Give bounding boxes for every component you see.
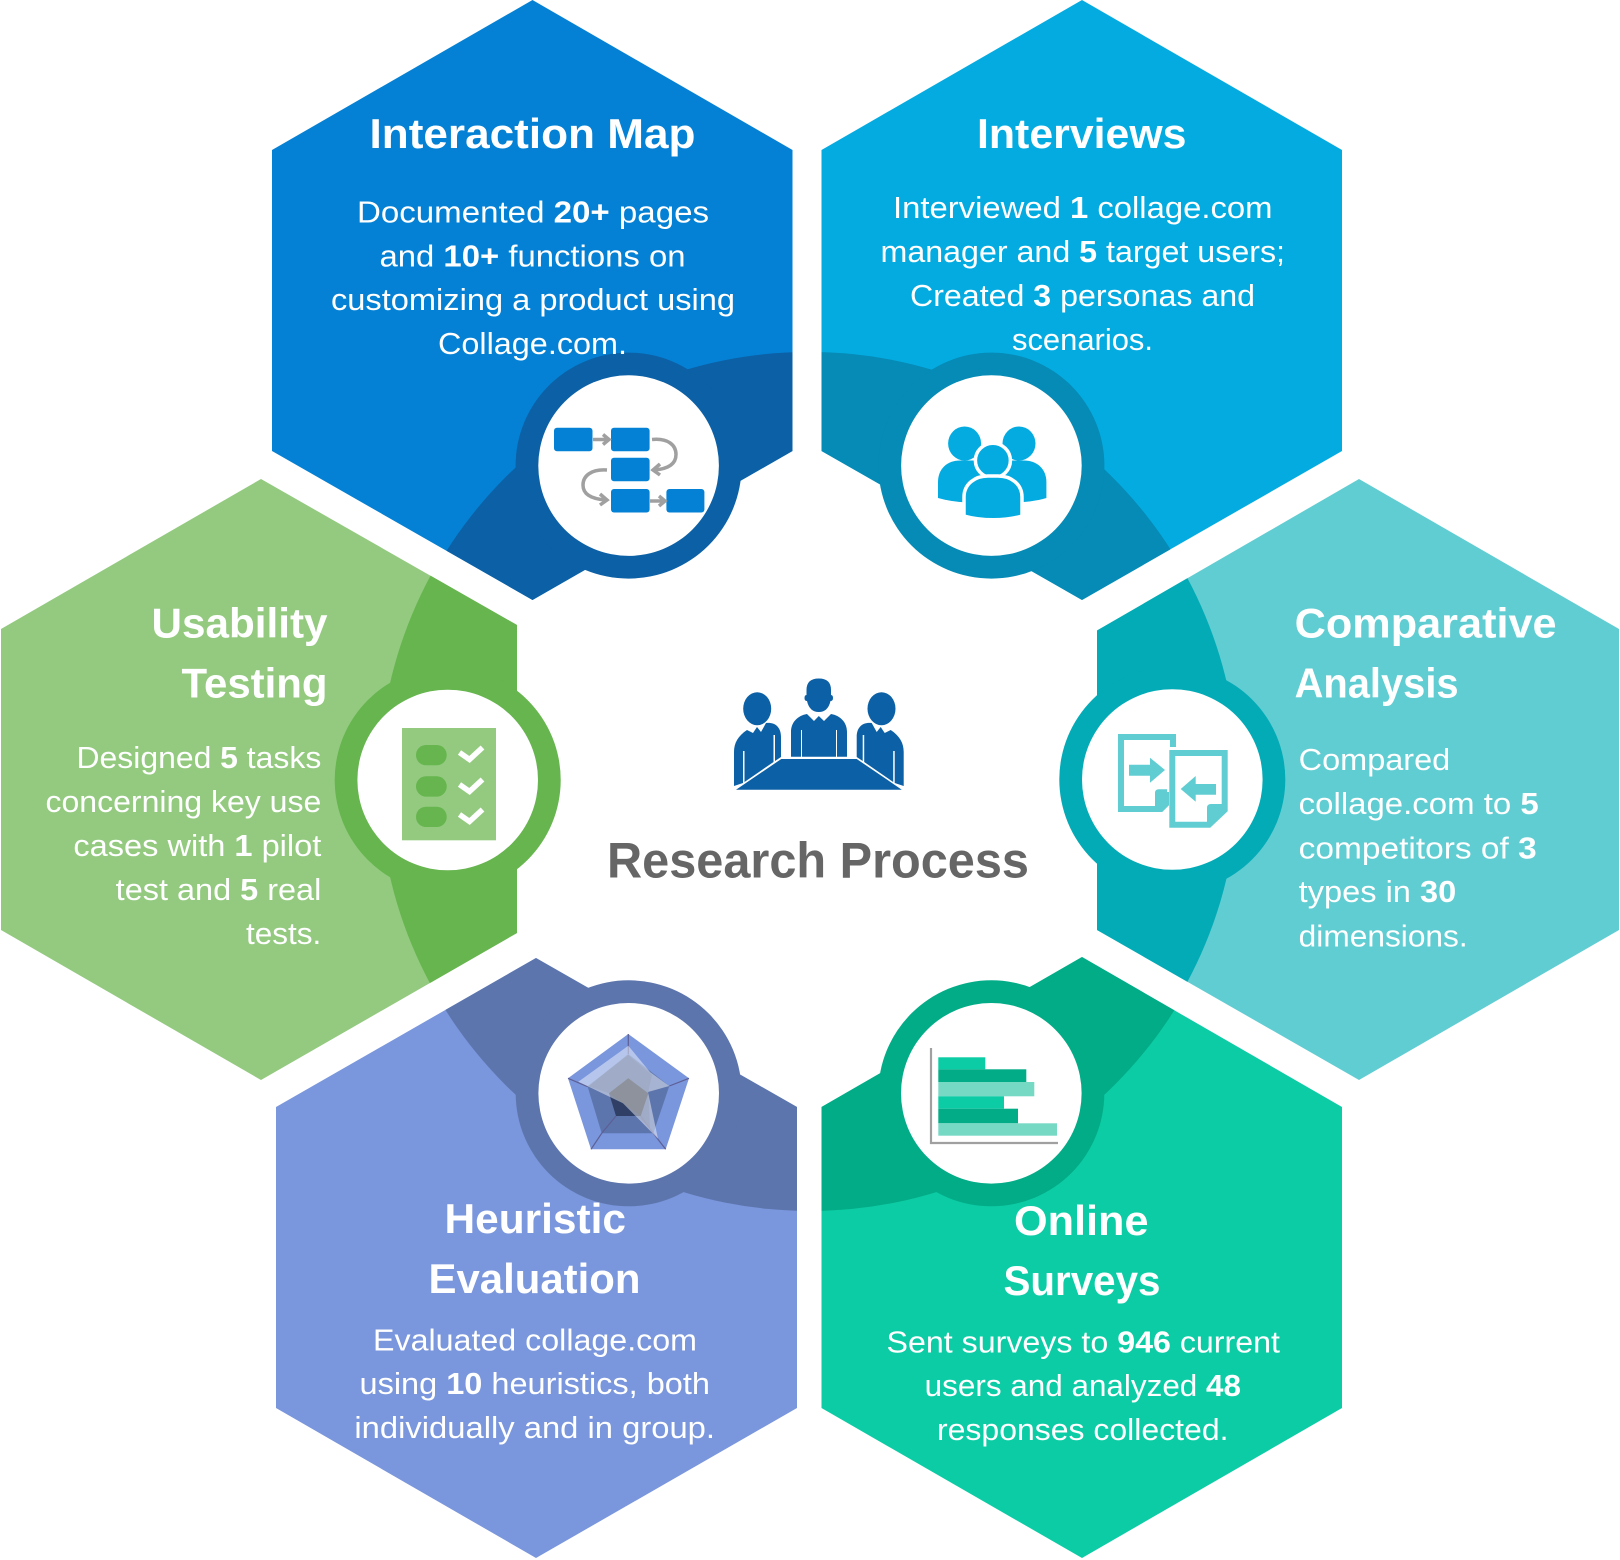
panel: Interaction Map — [272, 0, 792, 600]
text block: usability testing description: cases with 1 pilot — [73, 828, 322, 863]
heading: Interaction Map: Interaction Map — [370, 110, 696, 157]
text block: heuristic evaluation description — [354, 1322, 715, 1445]
inner dark band — [822, 957, 1174, 1211]
heading: Usability Testing: Usability — [152, 600, 328, 646]
text block: interaction map description: customizing a product using — [331, 282, 735, 317]
panel: Online Surveys — [822, 957, 1342, 1558]
text block: comparative analysis description: Compared — [1299, 742, 1450, 777]
text block: online surveys description: responses collected. — [937, 1412, 1228, 1447]
text block: comparative analysis description: competitors of 3 — [1299, 831, 1537, 866]
text block: usability testing description — [46, 740, 322, 951]
inner dark band — [446, 958, 797, 1211]
text block: interviews description: manager and 5 target users; — [880, 234, 1285, 269]
heading: Usability Testing: Testing — [182, 660, 328, 706]
inner dark band — [446, 352, 792, 600]
panel: Interviews — [822, 0, 1342, 600]
heading: Heuristic Evaluation: Heuristic — [444, 1195, 626, 1242]
text block: interviews description — [880, 190, 1285, 357]
text block: heuristic evaluation description: individually and in group. — [354, 1410, 715, 1445]
heading: Online Surveys — [1004, 1197, 1160, 1304]
heading: Comparative Analysis — [1295, 600, 1557, 706]
text block: interaction map description — [331, 194, 735, 361]
heading: Heuristic Evaluation — [428, 1195, 640, 1302]
icon: two documents with arrows — [1059, 666, 1285, 892]
hexagon: usability testing background — [1, 479, 517, 1080]
heading: Online Surveys: Surveys — [1004, 1257, 1160, 1304]
text block: comparative analysis description: dimensions. — [1299, 918, 1468, 954]
text block: interaction map description: Documented 20+ pages — [357, 194, 709, 229]
text block: interviews description: scenarios. — [1012, 322, 1153, 357]
text block: interaction map description: Collage.com. — [438, 326, 627, 361]
text block: heuristic evaluation description: Evaluated collage.com — [373, 1322, 697, 1357]
title: Research Process: Research Process — [607, 833, 1029, 889]
heading: Heuristic Evaluation: Evaluation — [428, 1255, 640, 1302]
heading: Online Surveys: Online — [1014, 1197, 1148, 1244]
text block: usability testing description: test and 5 real — [116, 872, 321, 907]
icon: radar chart — [516, 980, 742, 1206]
inner dark band — [822, 352, 1170, 600]
heading: Comparative Analysis: Comparative — [1295, 600, 1557, 646]
heading: Usability Testing — [152, 600, 328, 706]
text block: usability testing description: tests. — [246, 916, 321, 951]
text block: usability testing description: Designed 5 tasks — [76, 740, 321, 775]
icon: meeting table with three people — [734, 678, 904, 790]
icon: checklist — [335, 667, 561, 893]
inner dark band — [390, 576, 517, 983]
heading: Interviews: Interviews — [977, 110, 1186, 157]
panel: Comparative Analysis — [1059, 479, 1619, 1080]
hexagon: interaction map background — [272, 0, 792, 600]
text block: interviews description: Interviewed 1 collage.com — [893, 190, 1272, 225]
text block: usability testing description: concerning key use — [46, 784, 321, 819]
panel: Heuristic Evaluation — [276, 958, 797, 1558]
hexagon: online surveys background — [822, 957, 1342, 1558]
hexagon: comparative analysis background — [1097, 479, 1619, 1080]
text block: comparative analysis description: types in 30 — [1299, 874, 1456, 909]
icon: interaction flow diagram — [516, 353, 742, 579]
text block: comparative analysis description — [1299, 742, 1539, 954]
text block: online surveys description: users and analyzed 48 — [925, 1368, 1241, 1403]
panel: Usability Testing — [1, 479, 561, 1080]
inner dark band — [1097, 578, 1226, 982]
hexagon: interviews background — [822, 0, 1342, 600]
text block: online surveys description — [886, 1324, 1280, 1447]
icon: horizontal bar chart — [878, 980, 1104, 1206]
text block: comparative analysis description: collage.com to 5 — [1299, 786, 1539, 821]
text block: interaction map description: and 10+ functions on — [380, 238, 686, 273]
icon: group of people — [878, 353, 1104, 579]
heading: Comparative Analysis: Analysis — [1295, 660, 1459, 706]
text block: heuristic evaluation description: using 10 heuristics, both — [360, 1366, 710, 1401]
text block: online surveys description: Sent surveys to 946 current — [886, 1324, 1280, 1360]
hexagon: heuristic evaluation background — [276, 958, 797, 1558]
text block: interviews description: Created 3 personas and — [910, 278, 1255, 313]
